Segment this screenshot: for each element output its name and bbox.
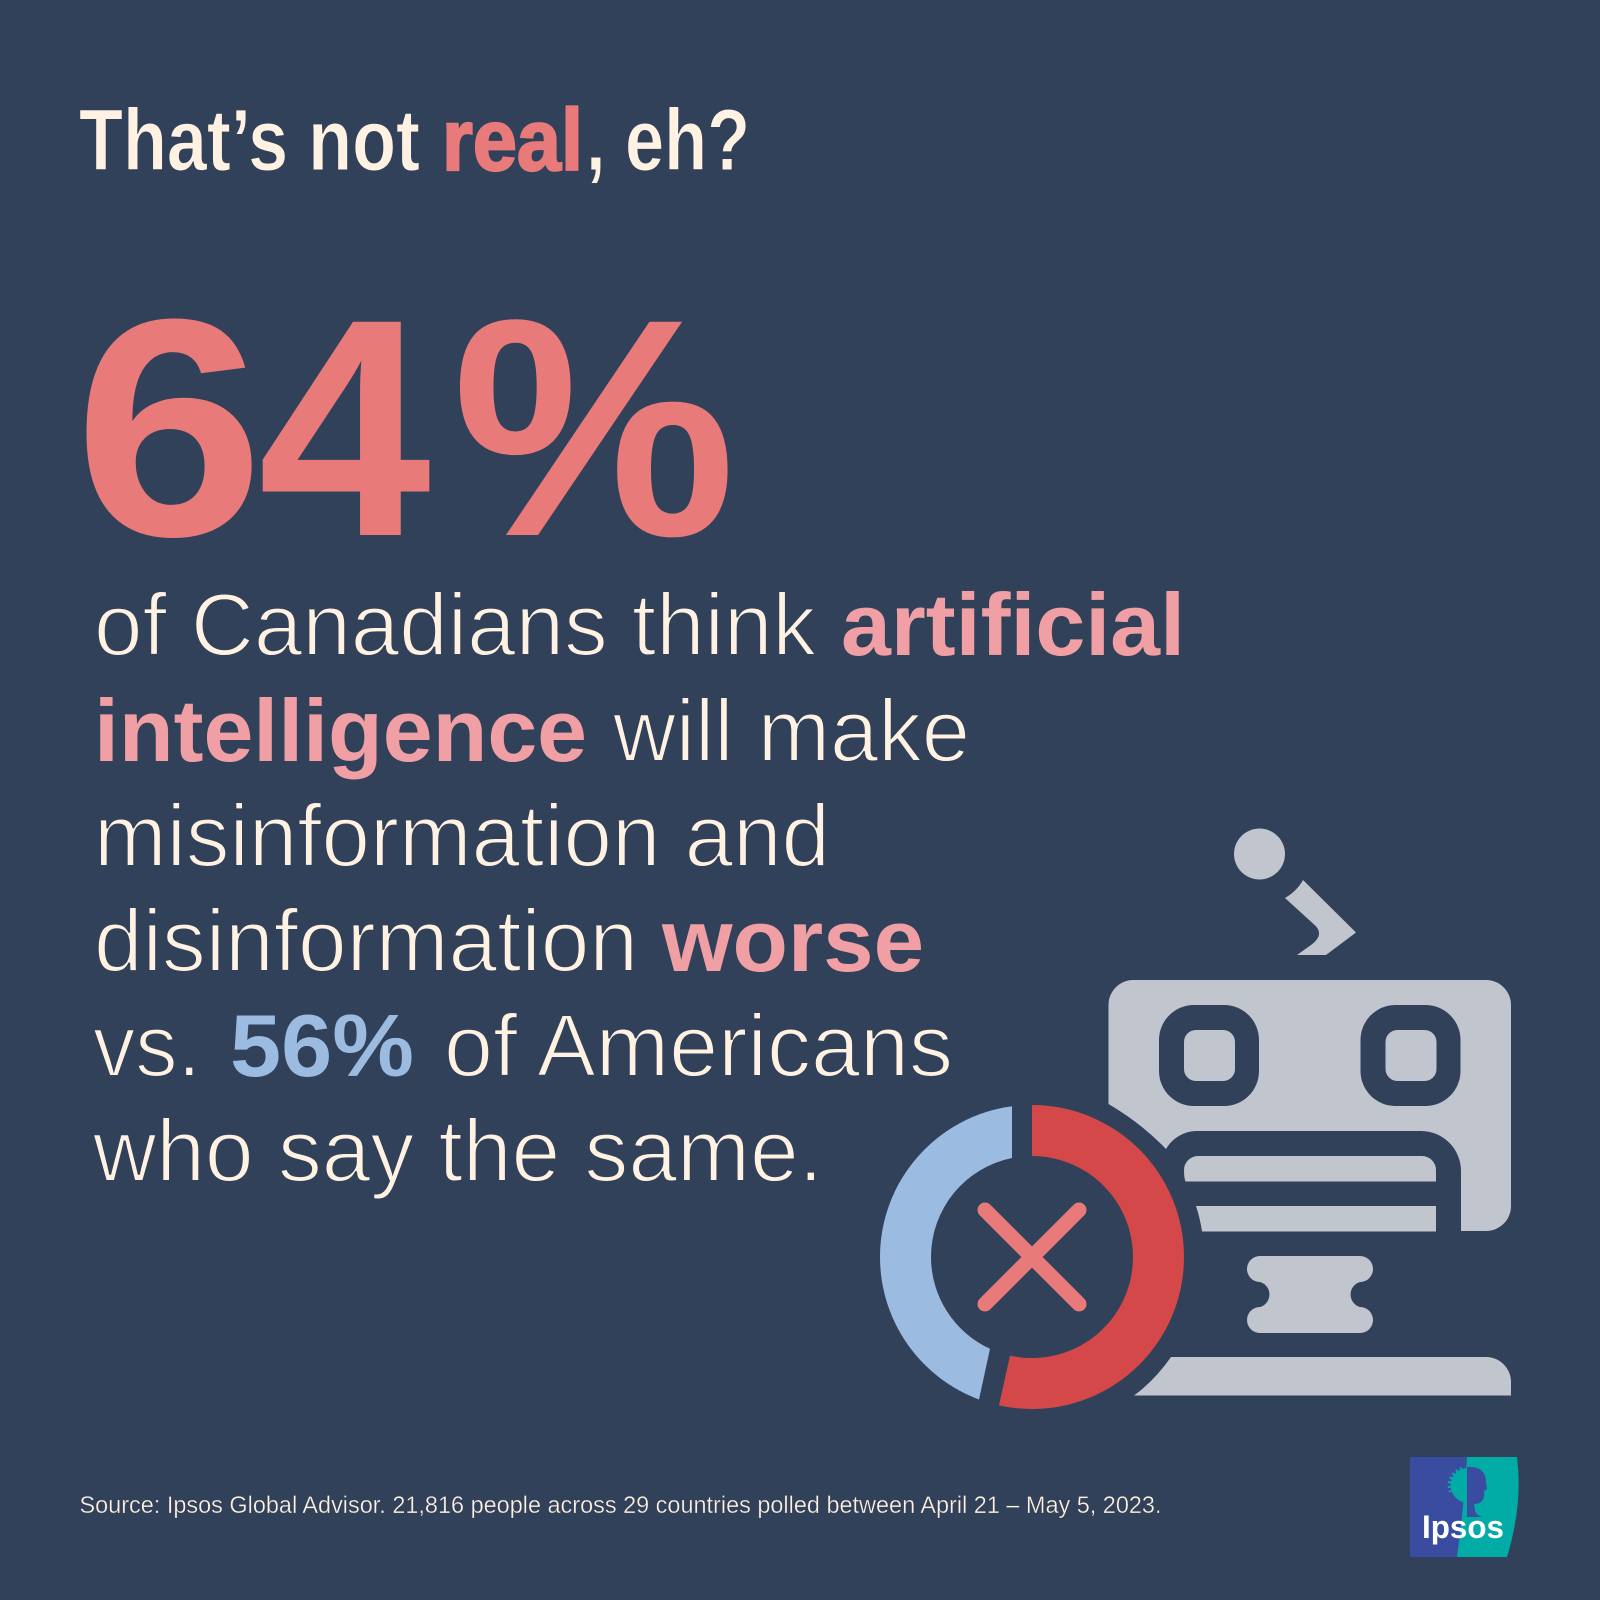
logo head silhouette <box>1467 1467 1487 1517</box>
body text: who say the same. <box>92 1101 823 1200</box>
robot base <box>1134 1357 1511 1396</box>
body text: artificial <box>841 575 1185 674</box>
robot antenna ball <box>1234 828 1285 880</box>
big statistic: 64%: 4 <box>258 254 433 601</box>
title: That’s not <box>79 92 420 189</box>
body text: of Americans <box>444 996 953 1095</box>
logo teal panel <box>1457 1457 1519 1557</box>
body text: of Canadians think <box>94 575 817 674</box>
cross mark <box>985 1210 1079 1304</box>
robot mouth lower bar <box>1196 1206 1436 1232</box>
big statistic: 64%: % <box>452 254 736 601</box>
robot mouth upper bar <box>1184 1156 1436 1182</box>
logo wordmark: Ipsos <box>1422 1509 1504 1545</box>
body text: will make <box>612 681 970 780</box>
source note: Source: Ipsos Global Advisor. 21,816 people across 29 countries polled between April 21 – May 5, 2023. <box>80 1492 1162 1519</box>
robot right pupil <box>1386 1030 1436 1081</box>
logo tree <box>1451 1468 1467 1517</box>
logo blue panel <box>1410 1457 1485 1557</box>
body text: 56% <box>230 996 414 1095</box>
donut blue segment <box>880 1106 1012 1400</box>
title <box>79 92 750 189</box>
body text: intelligence <box>94 681 587 780</box>
title: real <box>442 92 583 189</box>
big statistic: 64% <box>74 254 736 601</box>
icon: donut with cross <box>880 1105 1184 1409</box>
icon: robot <box>1108 828 1511 1396</box>
body text: vs. <box>93 996 201 1095</box>
robot left pupil <box>1184 1030 1235 1081</box>
title: , eh? <box>586 92 750 189</box>
robot head <box>1108 980 1511 1231</box>
logo: Ipsos <box>1410 1457 1519 1557</box>
body text <box>92 575 1185 1200</box>
big statistic: 64%: 6 <box>74 254 264 601</box>
body text: worse <box>661 891 924 990</box>
body text: disinformation <box>94 891 638 990</box>
body text: misinformation and <box>94 786 830 885</box>
robot antenna arm <box>1285 880 1356 955</box>
donut red segment <box>999 1105 1184 1409</box>
robot neck <box>1247 1256 1373 1333</box>
